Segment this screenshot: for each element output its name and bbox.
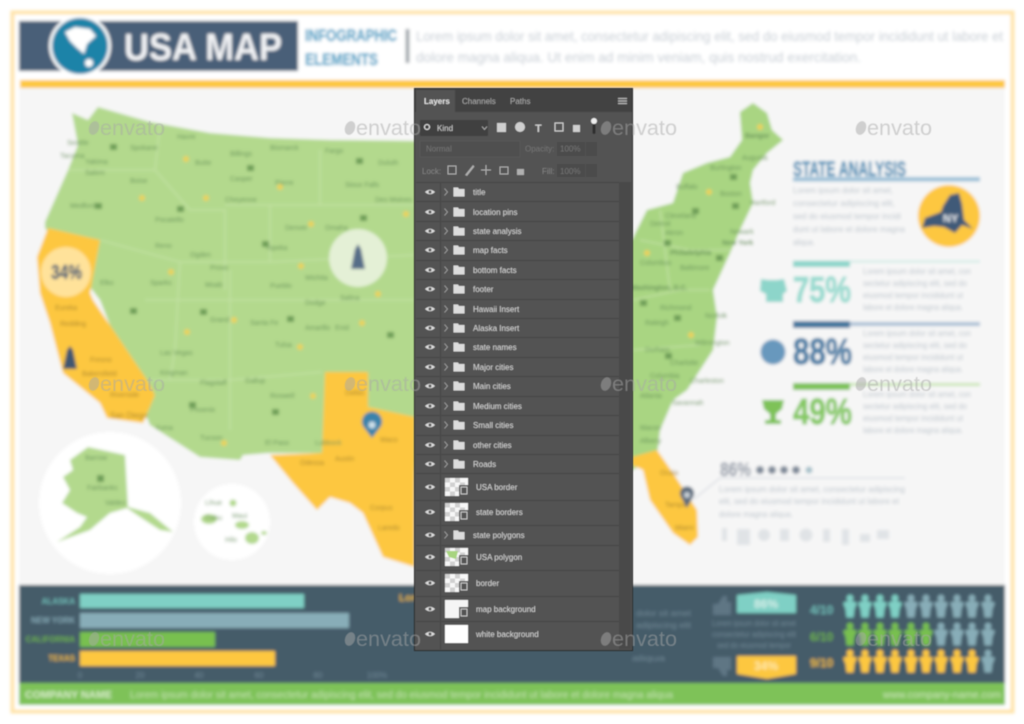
panel tab strip: Channels [462, 97, 496, 106]
layer: USA border: USA border [476, 483, 518, 492]
USA polygon [45, 103, 783, 570]
stat text: eiusmod tempor incididunt ut [863, 413, 964, 423]
city labels east [630, 133, 775, 445]
city labels west: Phoenix [190, 407, 216, 414]
layer: USA polygon [425, 548, 522, 566]
row three people [843, 650, 995, 672]
layer: Roads: Roads [473, 460, 496, 469]
layer: Medium cities [425, 402, 522, 411]
layer: location pins: location pins [473, 208, 517, 217]
stat: 75 percent [760, 260, 980, 312]
negative badge [713, 656, 796, 679]
monument icon [351, 244, 365, 269]
row separators [416, 182, 619, 649]
city labels east: Charlotte [670, 360, 699, 367]
watermark row three: envato [100, 628, 165, 651]
layer: footer [425, 284, 494, 294]
city labels east: Hartford [750, 200, 775, 207]
bar axis: 60 [255, 671, 264, 680]
city labels west: Kingman [160, 370, 188, 377]
city labels east: Boston [720, 191, 742, 198]
ratio labels: 4/10 [810, 603, 834, 617]
layer: Hawaii Insert [425, 304, 520, 314]
footer bar: COMPANY NAME [25, 690, 112, 701]
layer: Roads [425, 460, 496, 469]
city labels west: Sparks [150, 280, 172, 287]
city labels California and Texas: San Diego [110, 411, 148, 420]
watermark row one: envato [867, 117, 932, 140]
city labels west: Pocatello [155, 217, 184, 224]
Florida [632, 450, 698, 545]
city labels east: Columbia [650, 373, 680, 380]
city labels west: Flagstaff [200, 380, 227, 387]
city labels west: Billings [230, 151, 253, 158]
city labels west: Ogden [190, 252, 211, 259]
watermark row two: envato [100, 373, 165, 396]
layer: state polygons: state polygons [473, 531, 525, 540]
city labels east: Charleston [690, 378, 724, 385]
bars [80, 594, 304, 608]
footer bar: www.company-name.com [882, 689, 1001, 701]
watermark row three: envato [867, 628, 932, 651]
bar labels: TEXAS [48, 654, 76, 663]
badge text [712, 619, 797, 650]
envato watermarks [87, 117, 932, 651]
Alaska insert: Barrow [85, 455, 108, 462]
filter row [420, 118, 597, 136]
city labels west: Bismarck [270, 145, 299, 152]
layer: title [425, 188, 486, 197]
layer: map facts [425, 246, 508, 255]
New York circle icon: NY [943, 213, 959, 225]
city labels west: Dodge [305, 300, 326, 307]
panel body [414, 88, 632, 650]
layer: state analysis [425, 226, 521, 236]
bar axis: 80 [314, 671, 323, 680]
Hawaii insert: Lihue [205, 500, 222, 507]
layer: title: title [473, 188, 486, 197]
center facts text: aliqua [632, 654, 666, 663]
city labels west: Wichita [305, 275, 328, 282]
city labels west: Sioux Falls [345, 182, 380, 189]
watermark row three: envato [612, 628, 677, 651]
blend mode row: Opacity: [525, 144, 554, 154]
city labels west: Topeka [265, 245, 288, 252]
blend mode row: 100% [560, 144, 580, 154]
lock row: Lock: [422, 167, 441, 176]
stat text: labore et dolore magna aliqua. [863, 425, 963, 435]
badge text: consectetur adipiscing elit [712, 630, 797, 639]
city labels California and Texas: Laredo [378, 525, 400, 532]
panel tab strip [415, 89, 632, 112]
city labels east: Baltimore [680, 265, 710, 272]
layer: bottom facts [425, 266, 517, 275]
stat text: labore et dolore magna aliqua. [863, 302, 963, 312]
city labels west: Yakima [85, 159, 108, 166]
stat text: sectetur adipiscing elit, sed do [863, 278, 967, 288]
city labels west: Enid [335, 325, 349, 332]
footer bar [19, 683, 1005, 705]
layer: Hawaii Insert: Hawaii Insert [473, 305, 520, 314]
watermark row one: envato [100, 117, 165, 140]
lock row [422, 164, 597, 177]
city labels west: Gallup [245, 378, 265, 385]
badge text: sed do eiusmod tempor [717, 641, 791, 650]
watermark row two [87, 373, 932, 396]
callout text: dolore magna aliqua. [719, 509, 793, 519]
city labels east: Macon [640, 425, 661, 432]
USA map [37, 103, 905, 570]
location pin circle [329, 229, 387, 287]
ratio labels [810, 603, 834, 670]
layer: Major cities: Major cities [473, 363, 513, 372]
state borders [68, 125, 730, 430]
layer: state analysis: state analysis [473, 227, 521, 236]
watermark row one: envato [356, 117, 421, 140]
ratio labels: 9/10 [810, 656, 834, 670]
bar axis: 40 [195, 671, 204, 680]
city labels east: Newark [730, 229, 754, 236]
layer: white background [425, 625, 539, 643]
callout text: elit, sed do eiusmod tempor incididunt ut labore et [719, 496, 900, 506]
icon: target [760, 340, 786, 364]
stat text [863, 328, 971, 374]
layer: map background: map background [476, 605, 536, 614]
layer: USA polygon: USA polygon [476, 553, 522, 562]
layer: state names [425, 342, 517, 352]
people ratio chart [810, 595, 995, 672]
Hawaii insert: Oahu [205, 515, 222, 522]
stat: 88 percent [760, 321, 980, 374]
city labels west: Pierre [275, 180, 294, 187]
header intro text: dolore magna aliqua. Ut enim ad minim veniam, quis nostrud exercitation. [416, 49, 861, 65]
city labels west: Spokane [130, 145, 158, 152]
layer: Small cities: Small cities [473, 421, 513, 430]
city labels east: Albany [640, 438, 662, 445]
state analysis text: aliqua. [793, 237, 815, 247]
Photoshop layers panel [414, 88, 632, 650]
state analysis text: consectetur adipiscing elit, [793, 198, 895, 208]
city labels California and Texas: Fresno [90, 357, 112, 364]
city labels east: Buffalo [676, 184, 698, 191]
scrollbar [619, 182, 631, 649]
bar labels: NEW YORK [31, 616, 75, 625]
city labels east: Bangor [745, 133, 770, 140]
city labels California and Texas: Ocala [660, 470, 678, 477]
globe icon [49, 15, 111, 77]
small city dots [139, 124, 763, 446]
layer: Alaska Insert: Alaska Insert [473, 324, 520, 333]
icon: trophy [762, 400, 784, 424]
state analysis text: sed do eiusmod tempor incidi [793, 211, 901, 221]
Florida location pin [680, 486, 694, 508]
rating callout: 86% [720, 460, 751, 481]
center facts text [399, 593, 692, 663]
city labels west: Duluth [378, 160, 398, 167]
city labels west: Reno [155, 243, 172, 250]
city labels east: Norfolk [705, 313, 728, 320]
layer: border: border [476, 579, 499, 588]
city labels California and Texas: Dallas [345, 390, 365, 397]
city labels west: Grand [210, 317, 230, 324]
layer: Small cities [425, 420, 513, 430]
city labels west: Moab [205, 282, 223, 289]
California landmark icon [63, 346, 77, 369]
bar labels: ALASKA [42, 597, 75, 606]
filter row: T [535, 123, 542, 135]
stat text [863, 266, 971, 312]
city labels west: Des Moines [375, 197, 412, 204]
footer bar: Lorem ipsum dolor sit amet, consectetur adipiscing elit, sed do eiusmod tempor incididunt ut labore et dolore magna aliqua [130, 689, 673, 701]
layer: Major cities [425, 362, 513, 372]
main title: USA MAP [124, 27, 282, 69]
city labels California and Texas: Odessa [300, 460, 324, 467]
layer: Alaska Insert [425, 324, 520, 333]
city labels west: Boise [130, 178, 148, 185]
bar axis: 20 [136, 671, 145, 680]
city labels California and Texas: Tampa [665, 502, 686, 509]
bar axis: 100% [367, 671, 387, 680]
stat text: sectetur adipiscing elit, sed do [863, 340, 967, 350]
city labels California and Texas: Austin [335, 456, 355, 463]
city labels California and Texas: Redding [60, 321, 86, 328]
state analysis text [793, 185, 905, 247]
city labels west: Amarillo [305, 325, 330, 332]
city labels east: Savannah [672, 400, 704, 407]
city labels east: New York [722, 240, 753, 247]
city labels California and Texas: Corpus [370, 505, 393, 512]
lock row: Fill: [542, 167, 554, 176]
callout text [719, 484, 905, 519]
map background [19, 88, 1005, 586]
layer: Main cities: Main cities [473, 382, 511, 391]
layer: white background: white background [475, 630, 539, 639]
stat text: Lorem ipsum dolor sit amet, con [863, 389, 971, 399]
callout text: Lorem ipsum dolor sit amet, consectetur adipiscing [719, 484, 905, 494]
city labels east: Akron [665, 230, 683, 237]
city labels west: Lubbock [315, 440, 342, 447]
city labels west [60, 134, 412, 447]
Hawaii insert: Maui [232, 513, 248, 520]
stat: 75 percent: 75% [793, 269, 851, 310]
watermark row two: envato [612, 373, 677, 396]
city labels west: Omaha [325, 225, 348, 232]
bar chart [26, 594, 387, 680]
New York circle icon [918, 185, 980, 247]
city labels west: Medford [70, 203, 96, 210]
Hawaii insert: Hilo [225, 537, 237, 544]
ratio labels: 6/10 [810, 630, 834, 644]
city labels east: Richmond [660, 305, 692, 312]
watermark row three: envato [356, 628, 421, 651]
lock row: 100% [560, 167, 580, 176]
city labels west: Pueblo [270, 283, 292, 290]
city labels west: Roswell [270, 393, 295, 400]
layer: Medium cities: Medium cities [473, 402, 522, 411]
stat: 88 percent: 88% [793, 331, 852, 372]
city labels west: Cheyenne [225, 197, 257, 204]
positive badge: 86% [754, 597, 778, 611]
city labels east: Augusta [742, 155, 768, 162]
Alaska insert: Fairbanks [87, 485, 118, 492]
stat text: eiusmod tempor incididunt ut [863, 352, 964, 362]
stat text [863, 389, 971, 435]
center facts text: dolor sit amet [636, 609, 692, 618]
layer: other cities: other cities [473, 441, 512, 450]
city labels west: Havre [177, 134, 196, 141]
city labels west: Salina [340, 295, 360, 302]
center facts text: Lorem [399, 593, 430, 604]
city labels west: Seattle [67, 140, 89, 147]
city labels California and Texas [55, 305, 694, 532]
layer: Main cities [425, 382, 511, 391]
city labels California and Texas: Riverside [110, 392, 139, 399]
state analysis text: Lorem ipsum dolor sit amet, [793, 185, 893, 195]
city labels California and Texas: Waco [380, 437, 398, 444]
rating dots [756, 466, 812, 474]
city labels west: Butte [195, 160, 211, 167]
icon: thumb up [713, 596, 731, 615]
city labels west: Santa Fe [250, 320, 279, 327]
city labels California and Texas: Bakersfield [82, 371, 117, 378]
city labels east: Durham [645, 347, 670, 354]
city labels east: Raleigh [645, 320, 669, 327]
city labels west: Tulsa [275, 342, 292, 349]
filter row: Kind [437, 124, 453, 133]
badge text: Lorem ipsum dolor sit amet [712, 619, 797, 628]
layer: map background [425, 600, 536, 618]
city labels east: Wilmington [695, 340, 730, 347]
city labels east: Atlanta [640, 393, 662, 400]
layer: state names: state names [473, 343, 517, 352]
city labels east: Cleveland [665, 213, 696, 220]
stat text: labore et dolore magna aliqua. [863, 364, 963, 374]
heading rule [793, 177, 980, 182]
city labels east: Detroit [650, 221, 671, 228]
bottom facts panel [19, 585, 1005, 683]
blend mode row: Normal [426, 144, 452, 154]
California percent badge: 34% [51, 262, 82, 284]
watermark row three [87, 628, 932, 651]
city labels east: Philadelphia [670, 250, 711, 257]
negative badge: 34% [754, 659, 778, 673]
bar axis: 0 [78, 671, 83, 680]
city labels west: Elko [100, 280, 114, 287]
state analysis [793, 158, 980, 247]
layer: footer: footer [473, 285, 494, 294]
subtitle [305, 26, 397, 69]
eastern shading [632, 103, 783, 465]
state analysis heading: STATE ANALYSIS [793, 158, 906, 181]
subtitle: ELEMENTS [305, 50, 378, 69]
subtitle: INFOGRAPHIC [305, 26, 397, 45]
watermark row two: envato [356, 373, 421, 396]
California percent badge [41, 247, 91, 297]
stat text: Lorem ipsum dolor sit amet, con [863, 266, 971, 276]
watermark row two: envato [867, 373, 932, 396]
Alaska insert [39, 432, 181, 574]
icon: shirt [760, 279, 787, 302]
header intro text [416, 28, 1003, 65]
city labels west: Tacoma [60, 153, 85, 160]
row one people [843, 595, 995, 618]
state analysis text: dunt ut labore et dolore magna [793, 224, 905, 234]
watermark row one [87, 117, 932, 140]
yellow header rule [20, 80, 1005, 88]
bar labels [26, 597, 76, 663]
city labels east: Washington, D.C. [630, 285, 688, 292]
bar axis [78, 671, 387, 680]
positive badge [713, 592, 796, 615]
stat: 49 percent: 49% [793, 391, 852, 432]
blend mode row [420, 141, 597, 157]
layer: USA border [425, 478, 518, 496]
Texas location pin [362, 412, 382, 438]
city labels west: Yuma [155, 425, 173, 432]
rating callout [719, 460, 905, 545]
city labels east: Burlington [710, 165, 742, 172]
row two people [843, 623, 995, 646]
Texas [270, 372, 415, 567]
Hawaii insert [194, 484, 270, 560]
watermark row one: envato [612, 117, 677, 140]
layer: map facts: map facts [473, 246, 508, 255]
city labels west: Fargo [325, 148, 343, 155]
layer: state borders: state borders [476, 508, 523, 517]
major city markers [95, 144, 739, 415]
layer: state polygons [425, 530, 525, 540]
city labels east: Columbus [640, 260, 672, 267]
layer: location pins [425, 208, 517, 217]
city labels west: Tucson [200, 435, 223, 442]
city labels west: El Paso [265, 440, 289, 447]
city labels west: Las Vegas [160, 350, 193, 357]
city labels west: Salem [85, 170, 105, 177]
city labels west: Casper [230, 176, 253, 183]
header divider [406, 29, 410, 63]
small icon row [722, 528, 889, 545]
city labels west: Denver [285, 225, 308, 232]
panel tab strip: Layers [424, 97, 450, 106]
layer: bottom facts: bottom facts [473, 266, 517, 275]
layer: state borders [425, 503, 523, 521]
California [37, 228, 155, 423]
stat text: Lorem ipsum dolor sit amet, con [863, 328, 971, 338]
city labels California and Texas: Eureka [55, 305, 77, 312]
city labels California and Texas: Miami [675, 525, 694, 532]
stat text: eiusmod tempor incididunt ut [863, 290, 964, 300]
center facts text: adipiscing elit [636, 621, 692, 630]
panel tab strip: Paths [510, 97, 530, 106]
icon: thumb down [713, 657, 731, 676]
stat: 49 percent [762, 383, 980, 435]
stat text: sectetur adipiscing elit, sed do [863, 401, 967, 411]
Florida leader line [694, 478, 905, 499]
city labels west: Provo [210, 265, 228, 272]
title banner [19, 15, 298, 77]
Alaska insert: Valdez [105, 500, 126, 507]
layer: border [425, 574, 499, 592]
layer: other cities [425, 440, 512, 450]
bar labels: CALIFORNIA [26, 635, 75, 644]
